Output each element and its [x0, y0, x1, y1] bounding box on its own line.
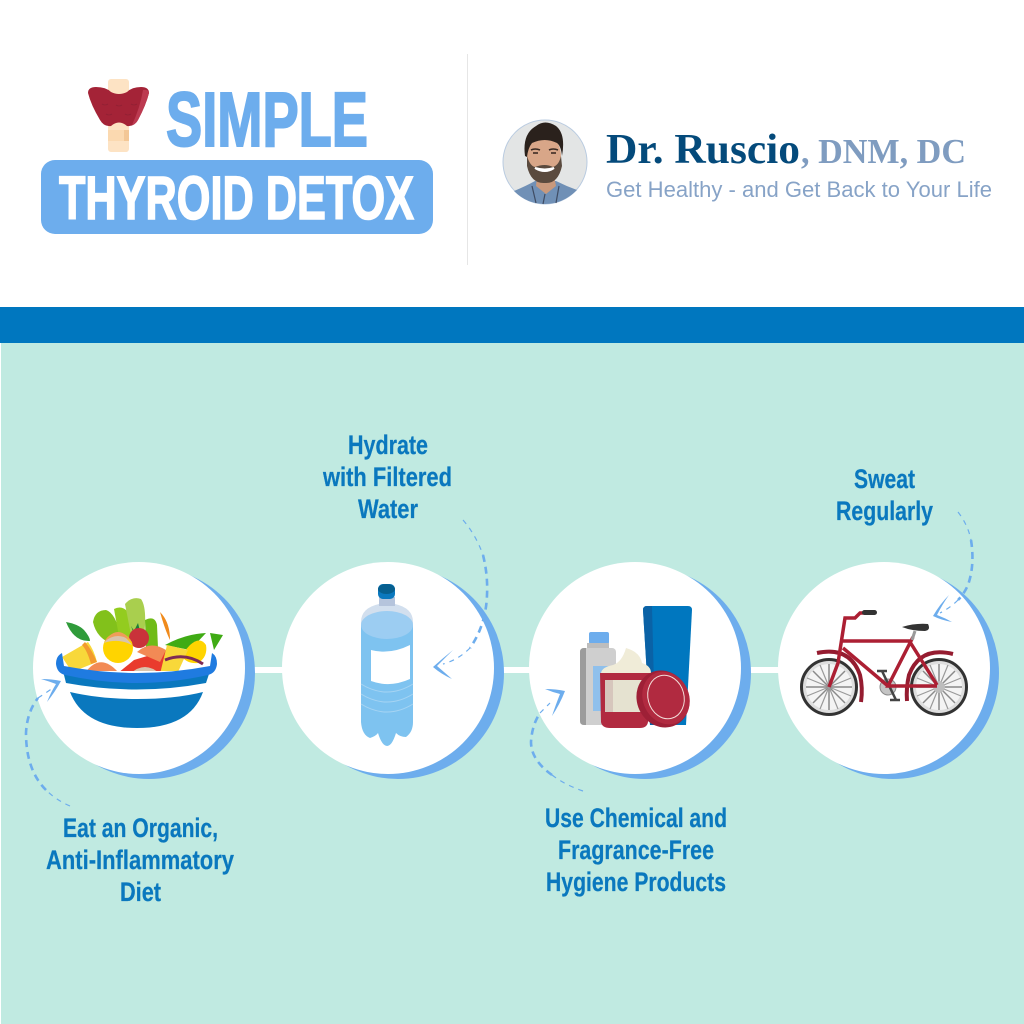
step 1: diet: [26, 562, 255, 907]
label: [322, 430, 452, 524]
label: Water: [358, 494, 418, 524]
circle: [282, 562, 494, 774]
title badge: [41, 160, 433, 234]
icon: thyroid: [88, 79, 149, 152]
label: Use Chemical and: [545, 803, 727, 833]
arrow: [531, 689, 583, 791]
title: THYROID DETOX: THYROID DETOX: [59, 164, 414, 232]
label: Sweat: [854, 464, 915, 494]
circle shadow: [539, 567, 751, 779]
icon: hygiene products: [580, 606, 699, 736]
arrow: [26, 679, 70, 806]
icon: salad bowl: [56, 598, 223, 728]
top band: [0, 307, 1024, 343]
label: [545, 803, 727, 897]
step 4: exercise: [778, 464, 999, 779]
circle: [33, 562, 245, 774]
icon: water bottle: [361, 584, 413, 746]
brand: Dr. Ruscio, DNM, DC: , DNM, DC: [801, 132, 966, 171]
label: Diet: [120, 877, 161, 907]
header logo: [41, 77, 433, 234]
label: with Filtered: [322, 462, 452, 492]
mint panel: [1, 343, 1024, 1024]
label: Eat an Organic,: [63, 813, 218, 843]
brand: Dr. Ruscio, DNM, DC: Dr. Ruscio: [606, 127, 800, 173]
label: Regularly: [836, 496, 933, 526]
connector line: [240, 667, 785, 673]
label: Anti-Inflammatory: [46, 845, 234, 875]
label: Fragrance-Free: [558, 835, 714, 865]
icon: bicycle: [802, 610, 966, 714]
step 3: products: [529, 562, 751, 897]
label: [46, 813, 234, 907]
circle: [529, 562, 741, 774]
circle shadow: [787, 567, 999, 779]
tagline: Get Healthy - and Get Back to Your Life: [606, 177, 992, 202]
label: Hygiene Products: [546, 867, 726, 897]
portrait: [503, 120, 587, 204]
arrow: [433, 520, 487, 679]
title: SIMPLE: SIMPLE: [166, 77, 368, 163]
circle shadow: [292, 567, 504, 779]
step 2: water: [282, 430, 504, 779]
circle shadow: [43, 567, 255, 779]
arrow: [933, 512, 972, 622]
circle: [778, 562, 990, 774]
brand: Dr. Ruscio, DNM, DC: [606, 127, 966, 173]
label: [836, 464, 933, 526]
label: Hydrate: [348, 430, 428, 460]
